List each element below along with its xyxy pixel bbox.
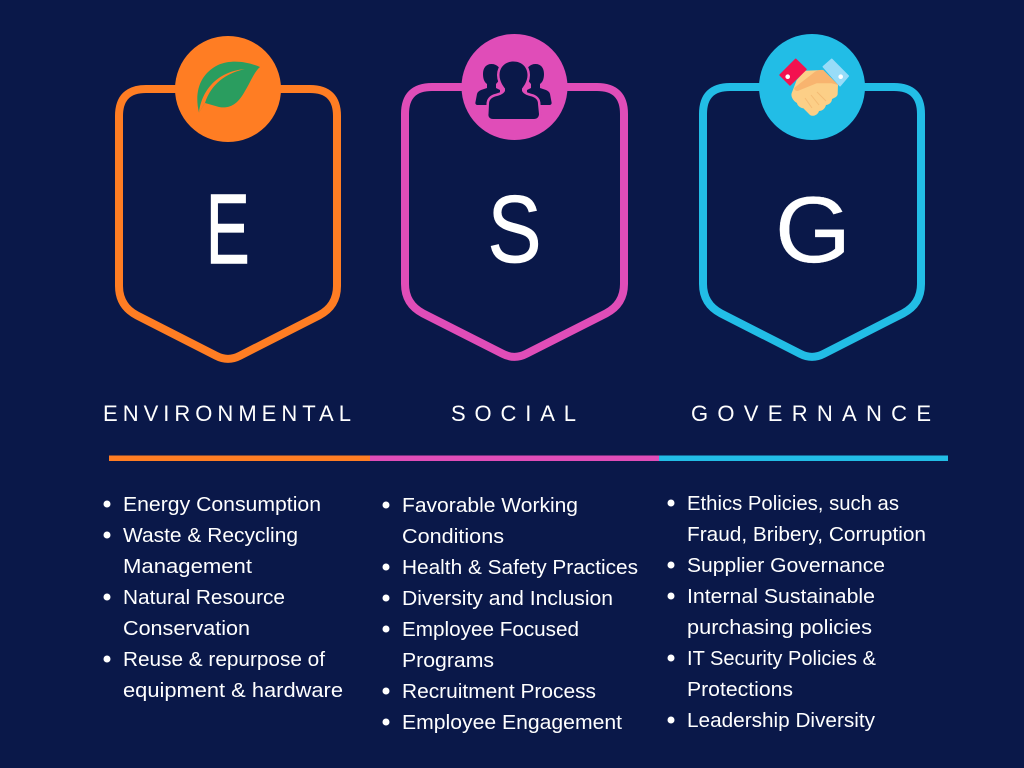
list: social: Programs [402,650,494,672]
list: social: Employee Focused [402,619,579,641]
list: governance: Ethics Policies, such as [687,493,899,515]
list: governance: IT Security Policies & [687,648,877,670]
letter S: S [488,176,542,283]
list: environmental: Management [123,556,252,578]
shield outline: governance [703,87,921,357]
heading: governance: GOVERNANCE [691,401,931,426]
list: environmental [104,494,343,702]
list: environmental: Waste & Recycling [123,525,298,547]
icon circle: social [462,34,568,140]
list: environmental: Energy Consumption [123,494,321,516]
list: environmental: Natural Resource [123,587,285,609]
list: governance: Supplier Governance [687,555,885,577]
list: governance: Internal Sustainable [687,586,875,608]
heading: social: SOCIAL [451,401,576,426]
list: governance: Protections [687,679,793,701]
divider bar [109,456,948,461]
list: environmental: Reuse & repurpose of [123,649,325,671]
list: governance: Leadership Diversity [687,710,875,732]
panel: social badge [405,34,624,357]
list: social: Diversity and Inclusion [402,588,613,610]
icon: handshake [780,59,848,116]
icon: leaf [197,62,260,112]
icon circle: governance [759,34,865,140]
letter G: G [775,177,851,282]
list: environmental: equipment & hardware [123,680,343,702]
shield outline: environmental [119,89,337,359]
list: environmental: Conservation [123,618,250,640]
icon: people [475,62,552,119]
list: social: Conditions [402,526,504,548]
list: social [382,495,638,734]
list: governance: Fraud, Bribery, Corruption [687,524,926,546]
list: social: Health & Safety Practices [402,557,638,579]
list: social: Recruitment Process [402,681,596,703]
shield outline: social [405,87,624,357]
list: governance: purchasing policies [687,617,872,639]
icon circle: environmental [175,36,281,142]
list: social: Favorable Working [402,495,578,517]
list: social: Employee Engagement [402,712,622,734]
list: governance [668,493,926,732]
panel: governance badge [703,34,921,357]
panel: environmental badge [119,36,337,359]
letter E: E [206,174,250,284]
heading: environmental: ENVIRONMENTAL [103,401,351,426]
